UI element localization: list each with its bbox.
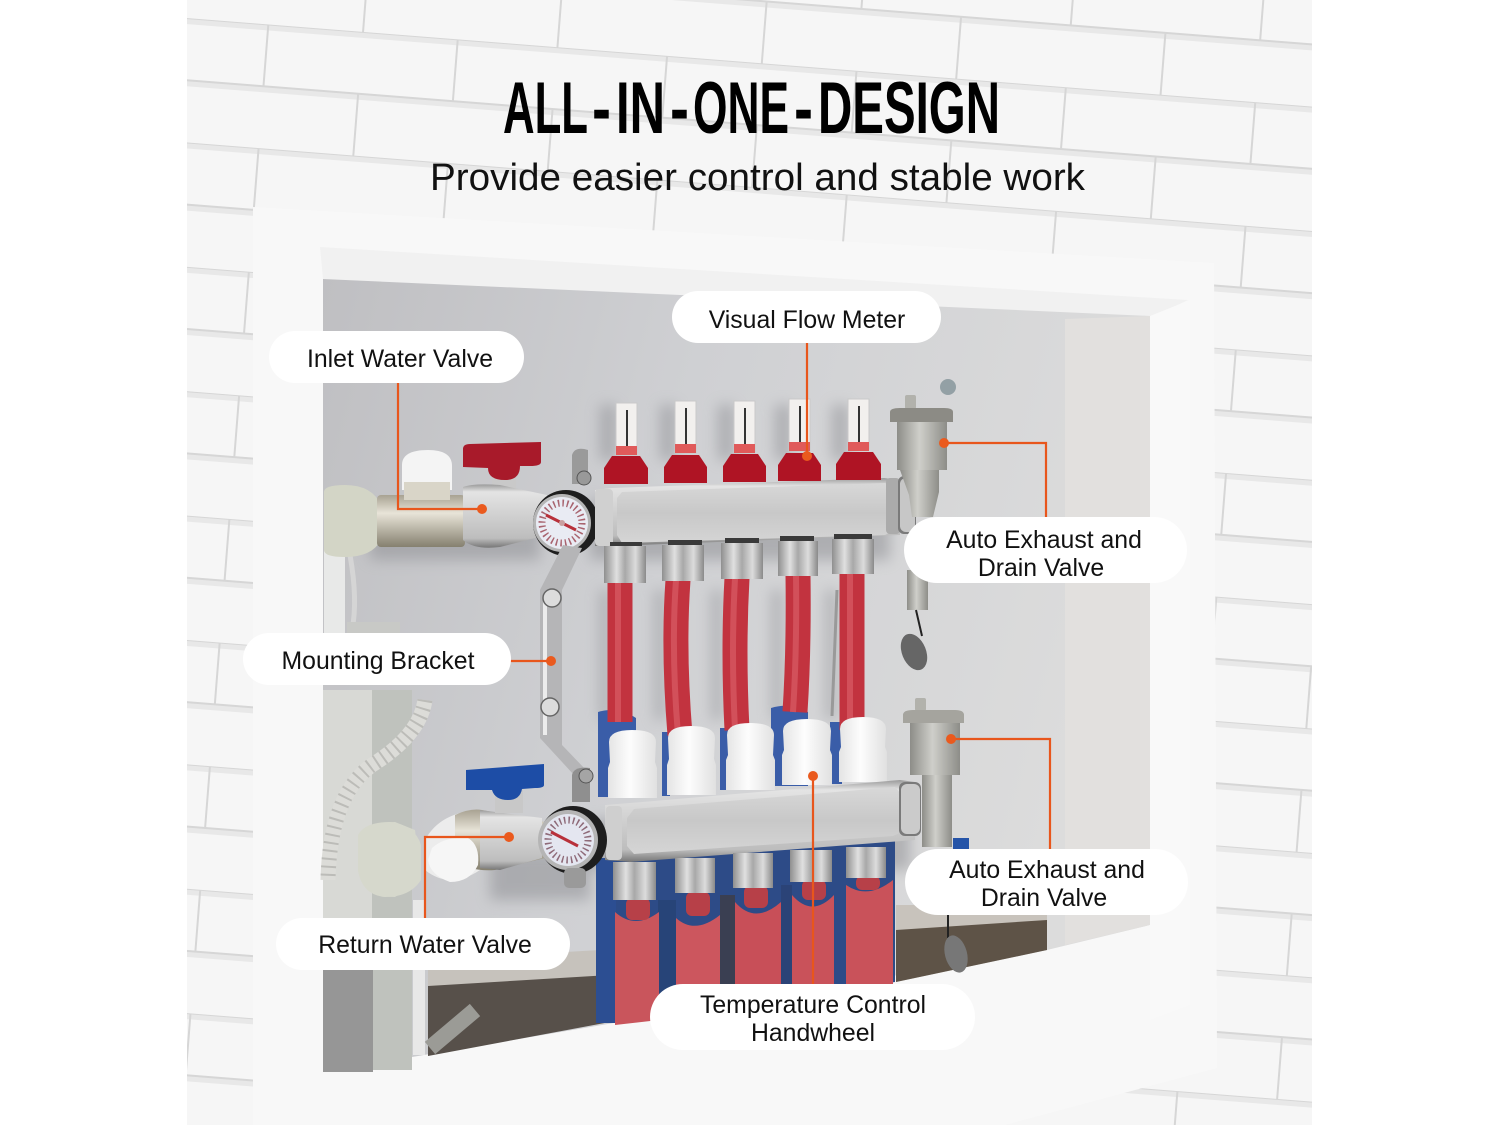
drop shadows — [370, 405, 910, 900]
inlet ball valve with red handle — [463, 442, 547, 548]
inlet gauge — [533, 490, 599, 556]
mounting bracket — [540, 449, 591, 800]
top connector nuts — [604, 534, 874, 583]
label: Return Water Valve — [276, 918, 570, 970]
title: IN — [616, 68, 665, 149]
blue insulation sleeves upper — [598, 706, 842, 797]
label: Visual Flow Meter — [672, 291, 941, 343]
bottom hoses: blue and red foam — [596, 840, 895, 1025]
label: Temperature Control Handwheel — [650, 984, 975, 1050]
background pipes — [323, 550, 475, 1072]
temperature control handwheels — [608, 717, 887, 798]
return valve assembly — [358, 764, 545, 897]
label: Auto Exhaust and Drain Valve (top) — [904, 517, 1187, 583]
top manifold bar — [595, 476, 916, 546]
subtitle: Provide easier control and stable work — [430, 157, 1086, 199]
callout dots — [477, 438, 956, 842]
label: Visual Flow Meter: Visual Flow Meter — [709, 307, 905, 334]
label: Auto Exhaust and Drain Valve (top): Auto Exhaust and — [946, 527, 1142, 554]
label: Temperature Control Handwheel: Handwheel — [751, 1020, 875, 1047]
title: - — [794, 68, 813, 149]
label: Mounting Bracket — [243, 633, 511, 685]
label: Inlet Water Valve: Inlet Water Valve — [307, 346, 493, 373]
title: - — [592, 68, 611, 149]
title: ALL — [503, 68, 588, 149]
label: Auto Exhaust and Drain Valve (bottom) — [905, 849, 1188, 915]
thin rod behind hose — [832, 590, 837, 716]
label: Auto Exhaust and Drain Valve (bottom): Auto Exhaust and — [949, 857, 1145, 884]
cabinet floor and shelf — [428, 905, 1047, 1056]
bottom exhaust and drain valve — [903, 698, 972, 975]
top exhaust and drain valve — [890, 379, 956, 674]
callout lines — [398, 340, 1050, 986]
label: Auto Exhaust and Drain Valve (bottom): Drain Valve — [981, 885, 1107, 912]
red hoses upper — [618, 572, 852, 735]
title: DESIGN — [818, 68, 1000, 149]
title: - — [670, 68, 689, 149]
label: Auto Exhaust and Drain Valve (top): Drain Valve — [978, 555, 1104, 582]
title: ONE — [693, 68, 789, 149]
flow meters — [604, 399, 881, 484]
label: Temperature Control Handwheel: Temperature Control — [700, 992, 926, 1019]
brick wall background — [187, 0, 1312, 1125]
label: Mounting Bracket: Mounting Bracket — [282, 648, 475, 675]
recessed white frame — [253, 207, 1217, 1125]
bottom manifold bar — [605, 780, 921, 862]
bottom connector nuts — [613, 847, 886, 900]
label: Inlet Water Valve — [269, 331, 524, 383]
return gauge — [538, 806, 607, 888]
inlet fittings — [324, 450, 465, 557]
bracket lower clip — [572, 768, 593, 802]
label: Return Water Valve: Return Water Valve — [318, 932, 532, 959]
